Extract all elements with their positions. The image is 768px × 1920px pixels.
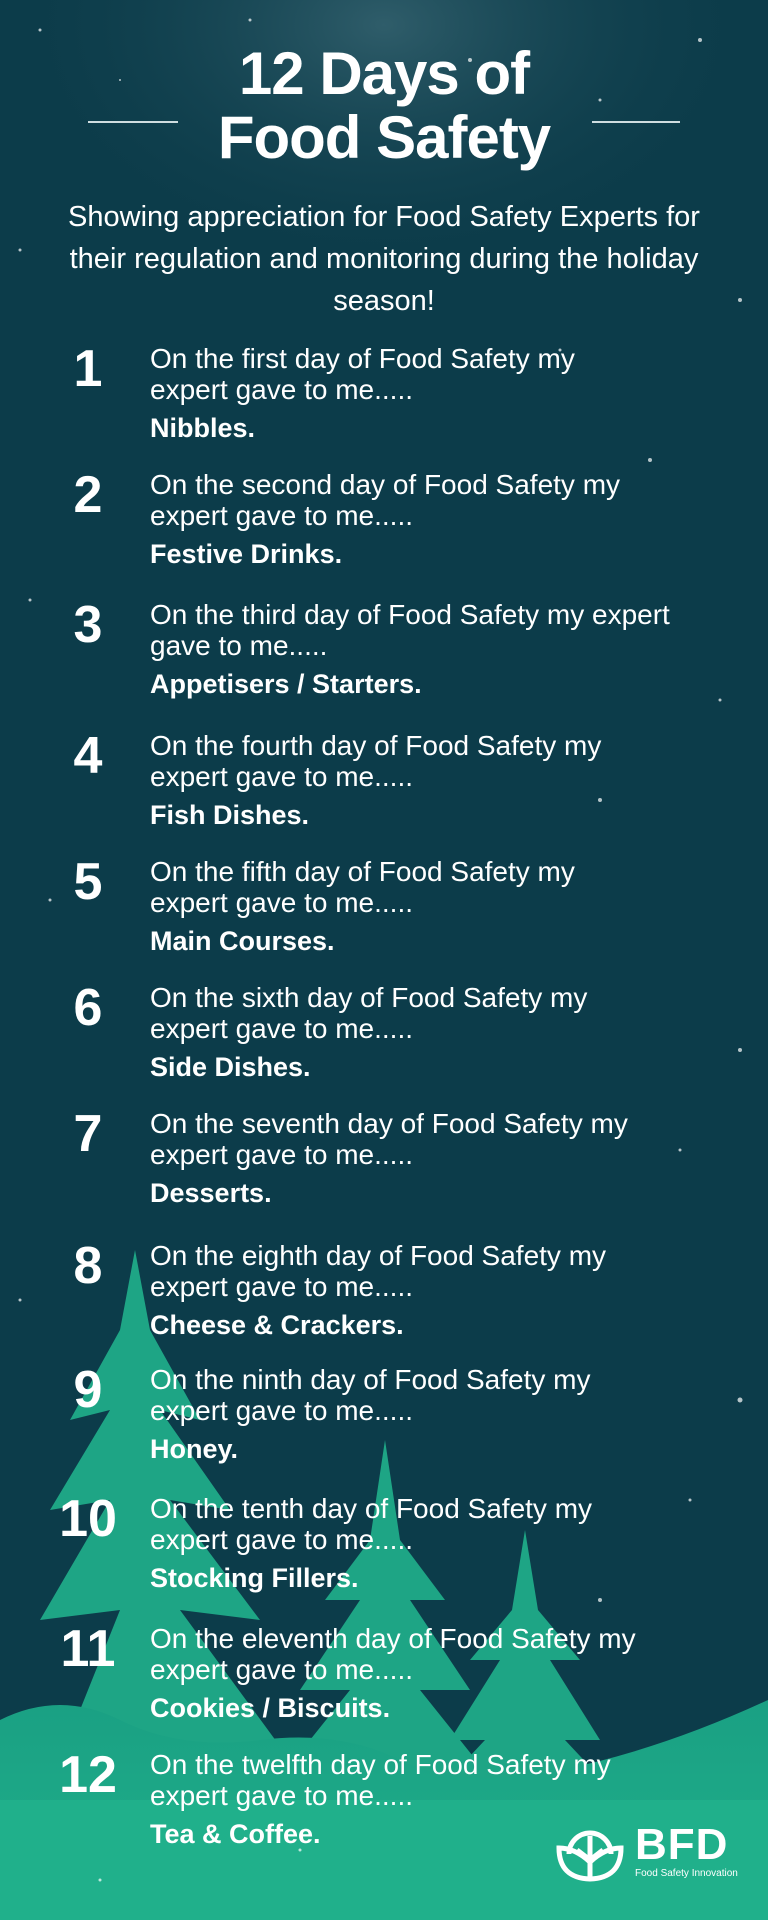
item 8: Cheese & Crackers.	[150, 1310, 404, 1340]
title decorative line left	[88, 121, 178, 123]
item 10: 10	[59, 1490, 117, 1548]
item 8: On the eighth day of Food Safety my	[150, 1240, 606, 1271]
item 12: expert gave to me.....	[150, 1780, 413, 1811]
item 1: On the first day of Food Safety my	[150, 343, 575, 374]
item 6: Side Dishes.	[150, 1052, 311, 1082]
item 4: 4	[74, 727, 102, 785]
item 6: On the sixth day of Food Safety my	[150, 982, 587, 1013]
item 8: 8	[74, 1237, 102, 1295]
title: 12 Days of	[239, 40, 529, 107]
item 4: expert gave to me.....	[150, 761, 413, 792]
item 8	[74, 1237, 606, 1340]
item 7	[74, 1105, 628, 1208]
item 11: Cookies / Biscuits.	[150, 1693, 390, 1723]
title: Food Safety	[218, 104, 550, 171]
item 9: 9	[74, 1361, 102, 1419]
item 5: On the fifth day of Food Safety my	[150, 856, 575, 887]
item 3: 3	[74, 596, 102, 654]
title	[218, 40, 551, 171]
item 2: On the second day of Food Safety my	[150, 469, 620, 500]
item 11: 11	[60, 1620, 115, 1678]
logo: BFD	[556, 1820, 738, 1882]
item 10: expert gave to me.....	[150, 1524, 413, 1555]
item 3: On the third day of Food Safety my expert	[150, 599, 670, 630]
item 4: On the fourth day of Food Safety my	[150, 730, 601, 761]
item 6: expert gave to me.....	[150, 1013, 413, 1044]
item 9: Honey.	[150, 1434, 238, 1464]
item 3	[74, 596, 670, 699]
item 2	[74, 466, 620, 569]
item 12	[59, 1746, 611, 1849]
title decorative line right	[592, 121, 680, 123]
item 2: Festive Drinks.	[150, 539, 342, 569]
item 8: expert gave to me.....	[150, 1271, 413, 1302]
item 10: On the tenth day of Food Safety my	[150, 1493, 592, 1524]
item 7: 7	[74, 1105, 102, 1163]
subtitle: their regulation and monitoring during the holiday	[70, 243, 698, 275]
item 9	[74, 1361, 590, 1464]
item 9: expert gave to me.....	[150, 1395, 413, 1426]
logo: BFD: Food Safety Innovation	[635, 1868, 738, 1879]
subtitle	[68, 201, 700, 317]
item 12: On the twelfth day of Food Safety my	[150, 1749, 611, 1780]
item 5: 5	[74, 853, 102, 911]
item 2: 2	[74, 466, 102, 524]
item 12: 12	[59, 1746, 117, 1804]
subtitle: Showing appreciation for Food Safety Experts for	[68, 201, 700, 233]
item 3: gave to me.....	[150, 630, 327, 661]
logo text: BFD	[635, 1820, 728, 1869]
item 2: expert gave to me.....	[150, 500, 413, 531]
item 12: Tea & Coffee.	[150, 1819, 321, 1849]
item 11: On the eleventh day of Food Safety my	[150, 1623, 636, 1654]
icon: leaf	[556, 1830, 624, 1882]
item 1: Nibbles.	[150, 413, 255, 443]
item 5: expert gave to me.....	[150, 887, 413, 918]
item 5: Main Courses.	[150, 926, 335, 956]
item 10: Stocking Fillers.	[150, 1563, 359, 1593]
item 7: On the seventh day of Food Safety my	[150, 1108, 628, 1139]
item 6: 6	[74, 979, 102, 1037]
item 11: expert gave to me.....	[150, 1654, 413, 1685]
item 11	[60, 1620, 636, 1723]
item 5	[74, 853, 575, 956]
item 4: Fish Dishes.	[150, 800, 309, 830]
item 9: On the ninth day of Food Safety my	[150, 1364, 590, 1395]
item 6	[74, 979, 588, 1082]
item 7: expert gave to me.....	[150, 1139, 413, 1170]
subtitle: season!	[333, 285, 435, 317]
item 3: Appetisers / Starters.	[150, 669, 422, 699]
item 1: 1	[74, 340, 102, 398]
item 7: Desserts.	[150, 1178, 272, 1208]
item 1	[74, 340, 575, 443]
item 10	[59, 1490, 592, 1593]
item 1: expert gave to me.....	[150, 374, 413, 405]
item 4	[74, 727, 602, 830]
